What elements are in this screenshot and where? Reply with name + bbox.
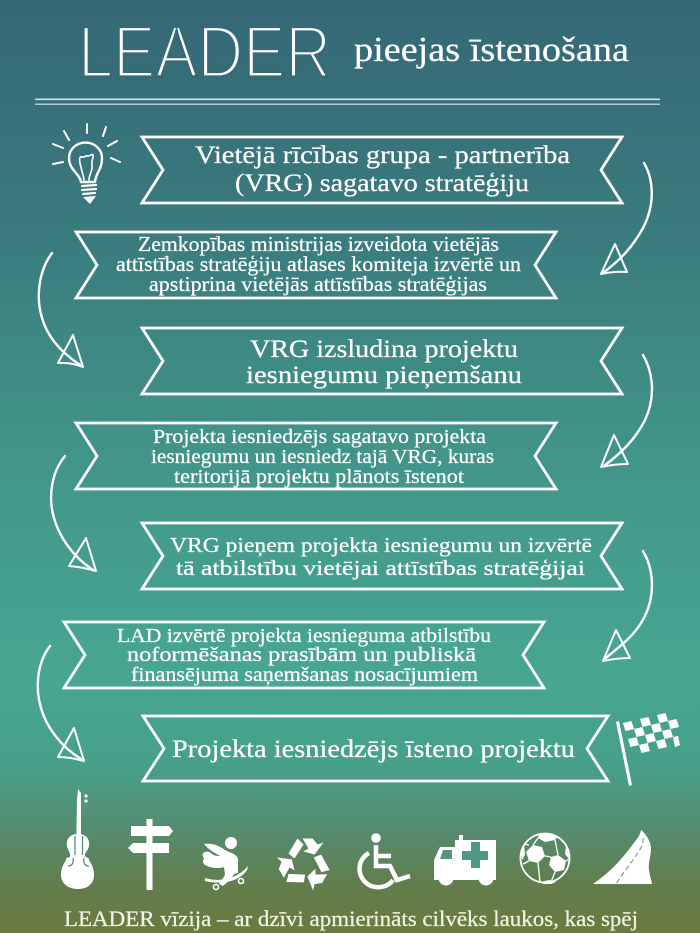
icon: signpost: [128, 819, 173, 890]
icon: light bulb: [53, 124, 120, 194]
icon: road: [593, 830, 652, 884]
subtitle: pieejas īstenošana: [354, 30, 630, 69]
step 2 text: [116, 232, 522, 296]
icon: football: [520, 833, 570, 884]
step 1 text: (VRG) sagatavo stratēģiju: [235, 168, 529, 197]
step 1 text: [195, 140, 570, 197]
step 4 ribbon: [76, 423, 556, 489]
step 2 text: attīstības stratēģiju atlases komiteja izvērtē un: [116, 252, 522, 276]
arrow: step 5 to step 6: [603, 551, 652, 661]
step 6 text: LAD izvērtē projekta iesnieguma atbilstību: [117, 625, 491, 647]
step 3 text: [246, 334, 522, 389]
step 7 ribbon: [143, 716, 608, 781]
icon: skateboarder: [203, 837, 248, 886]
step 4 text: [151, 426, 494, 488]
icon: violin: [61, 789, 94, 889]
icon: checkered flag: [616, 713, 680, 786]
step 6 text: noformēšanas prasībām un publiskā: [127, 644, 476, 666]
header divider: [35, 98, 660, 105]
step 5 text: tā atbilstību vietējai attīstības stratēģijai: [176, 556, 585, 580]
step 5 ribbon: [142, 523, 622, 589]
step 3 text: iesniegumu pieņemšanu: [246, 360, 522, 389]
step 6 text: finansējuma saņemšanas nosacījumiem: [131, 664, 478, 686]
step 1 text: Vietējā rīcības grupa - partnerība: [195, 140, 570, 169]
step 4 text: iesniegumu un iesniedz tajā VRG, kuras: [151, 446, 494, 468]
step 3 text: VRG izsludina projektu: [250, 334, 518, 363]
step 1 ribbon: [142, 137, 622, 203]
step 3 ribbon: [142, 328, 622, 394]
step 5 text: [170, 533, 592, 580]
title: LEADER: LEADER: [78, 12, 331, 93]
step 6 text: [117, 625, 491, 686]
step 5 text: VRG pieņem projekta iesniegumu un izvērtē: [170, 533, 592, 557]
icon: light bulb base: [83, 196, 96, 204]
step 2 ribbon: [76, 232, 556, 298]
arrow: step 3 to step 4: [601, 355, 652, 467]
footer text: LEADER vīzija – ar dzīvi apmierināts cilvēks laukos, kas spēj: [64, 906, 638, 931]
icon: wheelchair: [359, 833, 410, 887]
arrow: step 4 to step 5: [51, 456, 96, 571]
arrow: step 1 to step 2: [601, 163, 652, 274]
step 2 text: Zemkopības ministrijas izveidota vietējās: [138, 232, 499, 256]
skateboard wheels: [214, 878, 244, 890]
step 4 text: Projekta iesniedzējs sagatavo projekta: [153, 426, 486, 448]
step 4 text: teritorijā projektu plānots īstenot: [174, 466, 464, 488]
step 7 text: Projekta iesniedzējs īsteno projektu: [172, 734, 575, 763]
icon: ambulance: [434, 835, 496, 886]
step 6 ribbon: [64, 622, 544, 688]
arrow: step 2 to step 3: [39, 253, 83, 367]
icon: recycling: [273, 838, 334, 892]
step 2 text: apstiprina vietējās attīstības stratēģijas: [149, 272, 487, 296]
arrow: step 6 to step 7: [38, 646, 84, 761]
